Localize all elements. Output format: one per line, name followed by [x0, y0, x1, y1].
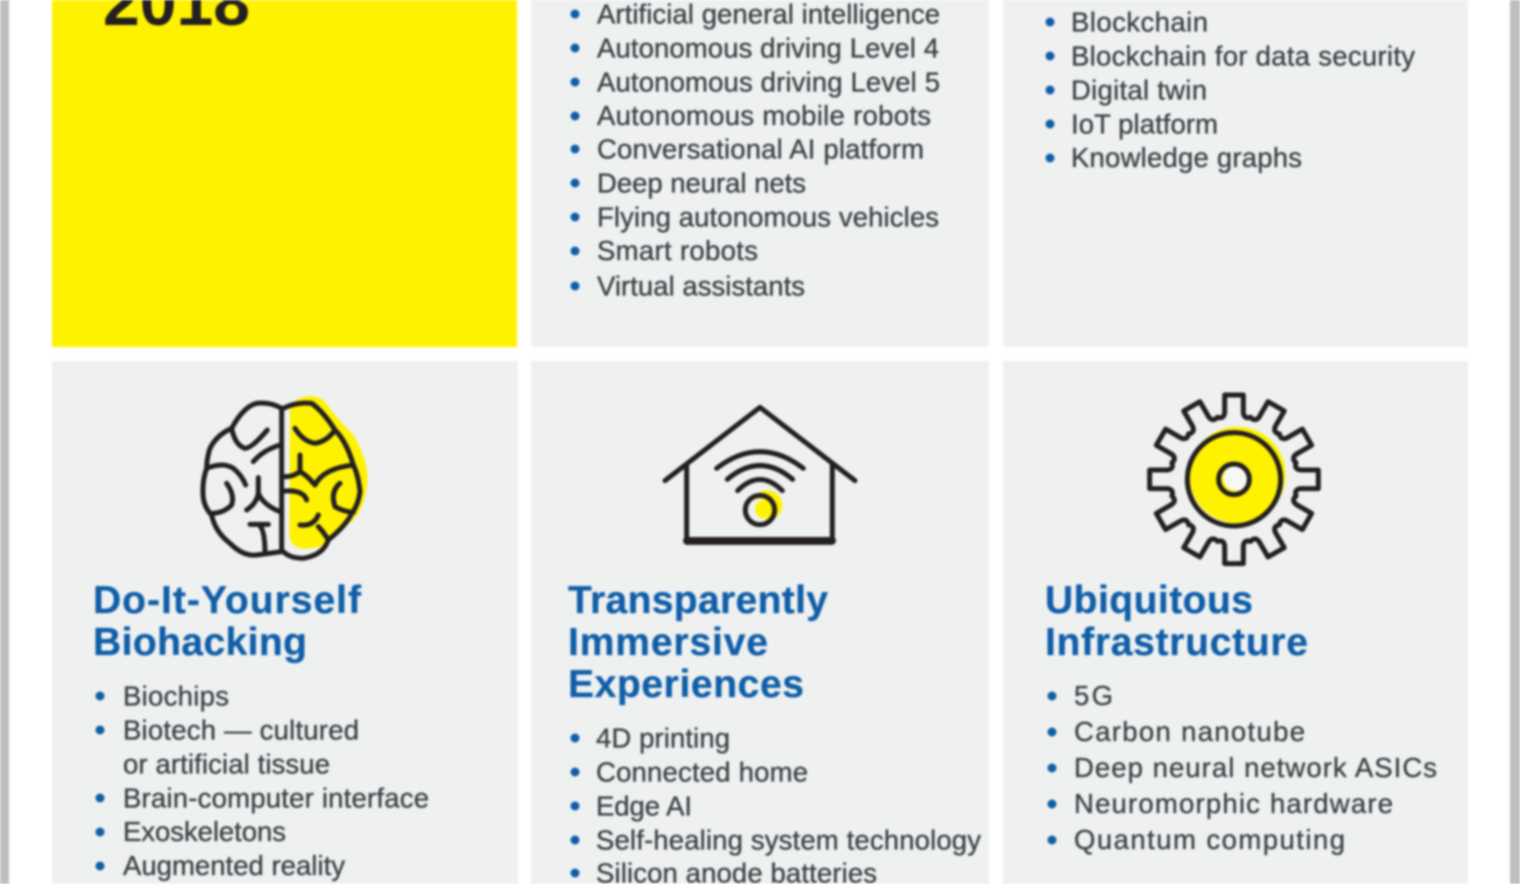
bullet list: Blockchain for data security: [1071, 40, 1415, 71]
heading: Infrastructure: [1045, 621, 1308, 664]
bullet list: Autonomous driving Level 4: [597, 32, 939, 63]
heading: Transparently: [568, 579, 828, 622]
icon: gear: [1150, 395, 1318, 564]
bullet list: or artificial tissue: [123, 748, 330, 779]
bullet list: Biochips: [123, 680, 229, 711]
heading: [568, 579, 828, 706]
panel: yellow title: [52, 0, 517, 347]
icon: smart home with wifi: [665, 407, 855, 542]
heading: Experiences: [568, 663, 804, 706]
bullet list: IoT platform: [1071, 108, 1218, 139]
panel: do-it-yourself biohacking: [52, 361, 518, 884]
bullet list: Virtual assistants: [597, 270, 805, 301]
heading: Ubiquitous: [1045, 579, 1253, 622]
bullet list: Autonomous driving Level 5: [597, 66, 940, 97]
heading: Biohacking: [93, 621, 307, 664]
bullet list: Autonomous mobile robots: [597, 100, 931, 131]
bullet list: Quantum computing: [1074, 824, 1345, 855]
bullet list: [96, 680, 429, 881]
bullet list: Carbon nanotube: [1074, 716, 1305, 747]
panel: digitalized ecosystems list: [1003, 0, 1468, 347]
bullet list: [1046, 6, 1415, 173]
bullet list: Flying autonomous vehicles: [597, 201, 939, 232]
panel: autonomous technologies list: [531, 0, 989, 347]
panel: transparently immersive experiences: [531, 361, 989, 884]
bullet list: Deep neural nets: [597, 167, 806, 198]
bullet list: 4D printing: [596, 722, 730, 753]
bullet list: Knowledge graphs: [1071, 142, 1302, 173]
bullet list: Smart robots: [597, 235, 758, 266]
bullet list: Biotech — cultured: [123, 714, 359, 745]
bullet list: Conversational AI platform: [597, 133, 924, 164]
bullet list: Digital twin: [1071, 74, 1207, 105]
heading: Immersive: [568, 621, 768, 664]
bullet list: Blockchain: [1071, 6, 1208, 37]
bullet list: Augmented reality: [123, 850, 345, 881]
bullet list: 5G: [1074, 680, 1113, 711]
bullet list: Edge AI: [596, 790, 692, 821]
bullet list: Neuromorphic hardware: [1074, 788, 1393, 819]
bullet list: Self-healing system technology: [596, 824, 981, 855]
heading: [1045, 579, 1308, 664]
bullet list: Exoskeletons: [123, 816, 286, 847]
panel: ubiquitous infrastructure: [1003, 361, 1468, 884]
heading: [93, 579, 362, 664]
bullet list: [570, 722, 981, 884]
bullet list: [570, 0, 940, 301]
icon: brain: [203, 396, 368, 558]
bullet list: Deep neural network ASICs: [1074, 752, 1437, 783]
heading: Do-It-Yourself: [93, 579, 362, 622]
bullet list: Connected home: [596, 756, 808, 787]
bullet list: [1048, 680, 1437, 855]
bullet list: Brain-computer interface: [123, 782, 429, 813]
